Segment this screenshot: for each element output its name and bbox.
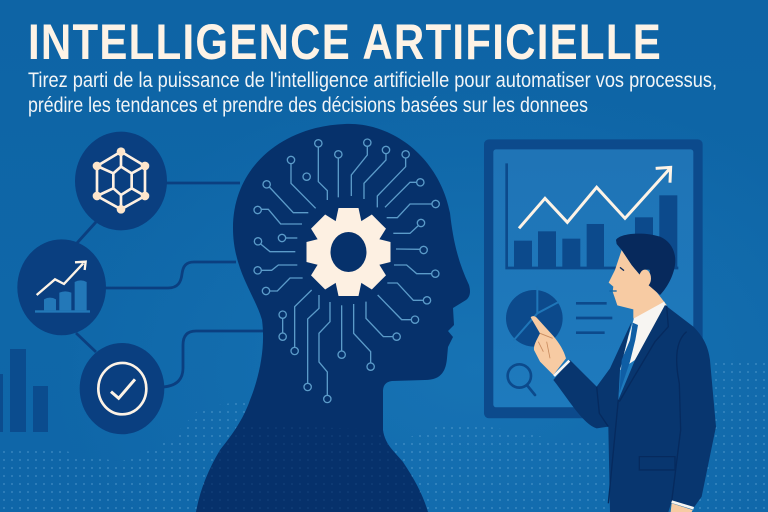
jacket [553,305,716,512]
title: INTELLIGENCE ARTIFICIELLE [28,14,662,70]
shirt [620,302,667,370]
icon: growth chart [17,239,106,335]
eye and mouth [620,267,624,271]
pie chart [506,287,563,347]
hair [616,234,675,295]
bar and line chart [507,163,678,268]
subtitle: prédire les tendances et prendre des décisions basées sur les donnees [28,94,588,117]
jacket details [597,306,687,503]
head dots [196,424,428,512]
icon: network cube [75,132,167,230]
connector lines [76,183,264,387]
background bar chart [0,349,48,432]
subtitle [28,69,717,117]
hand pointing [531,316,566,375]
shirt cuffs [554,361,569,376]
text lines [576,303,612,333]
ear [639,270,651,287]
head silhouette [196,124,470,512]
icon: check mark [80,343,164,434]
businessman [531,234,716,512]
tie [619,323,638,393]
icon: gear [306,208,390,296]
wrist [671,503,693,512]
circuit traces [254,139,439,403]
neck and face [609,250,667,325]
icon: magnifier [508,364,535,395]
panel: dashboard [484,139,703,418]
